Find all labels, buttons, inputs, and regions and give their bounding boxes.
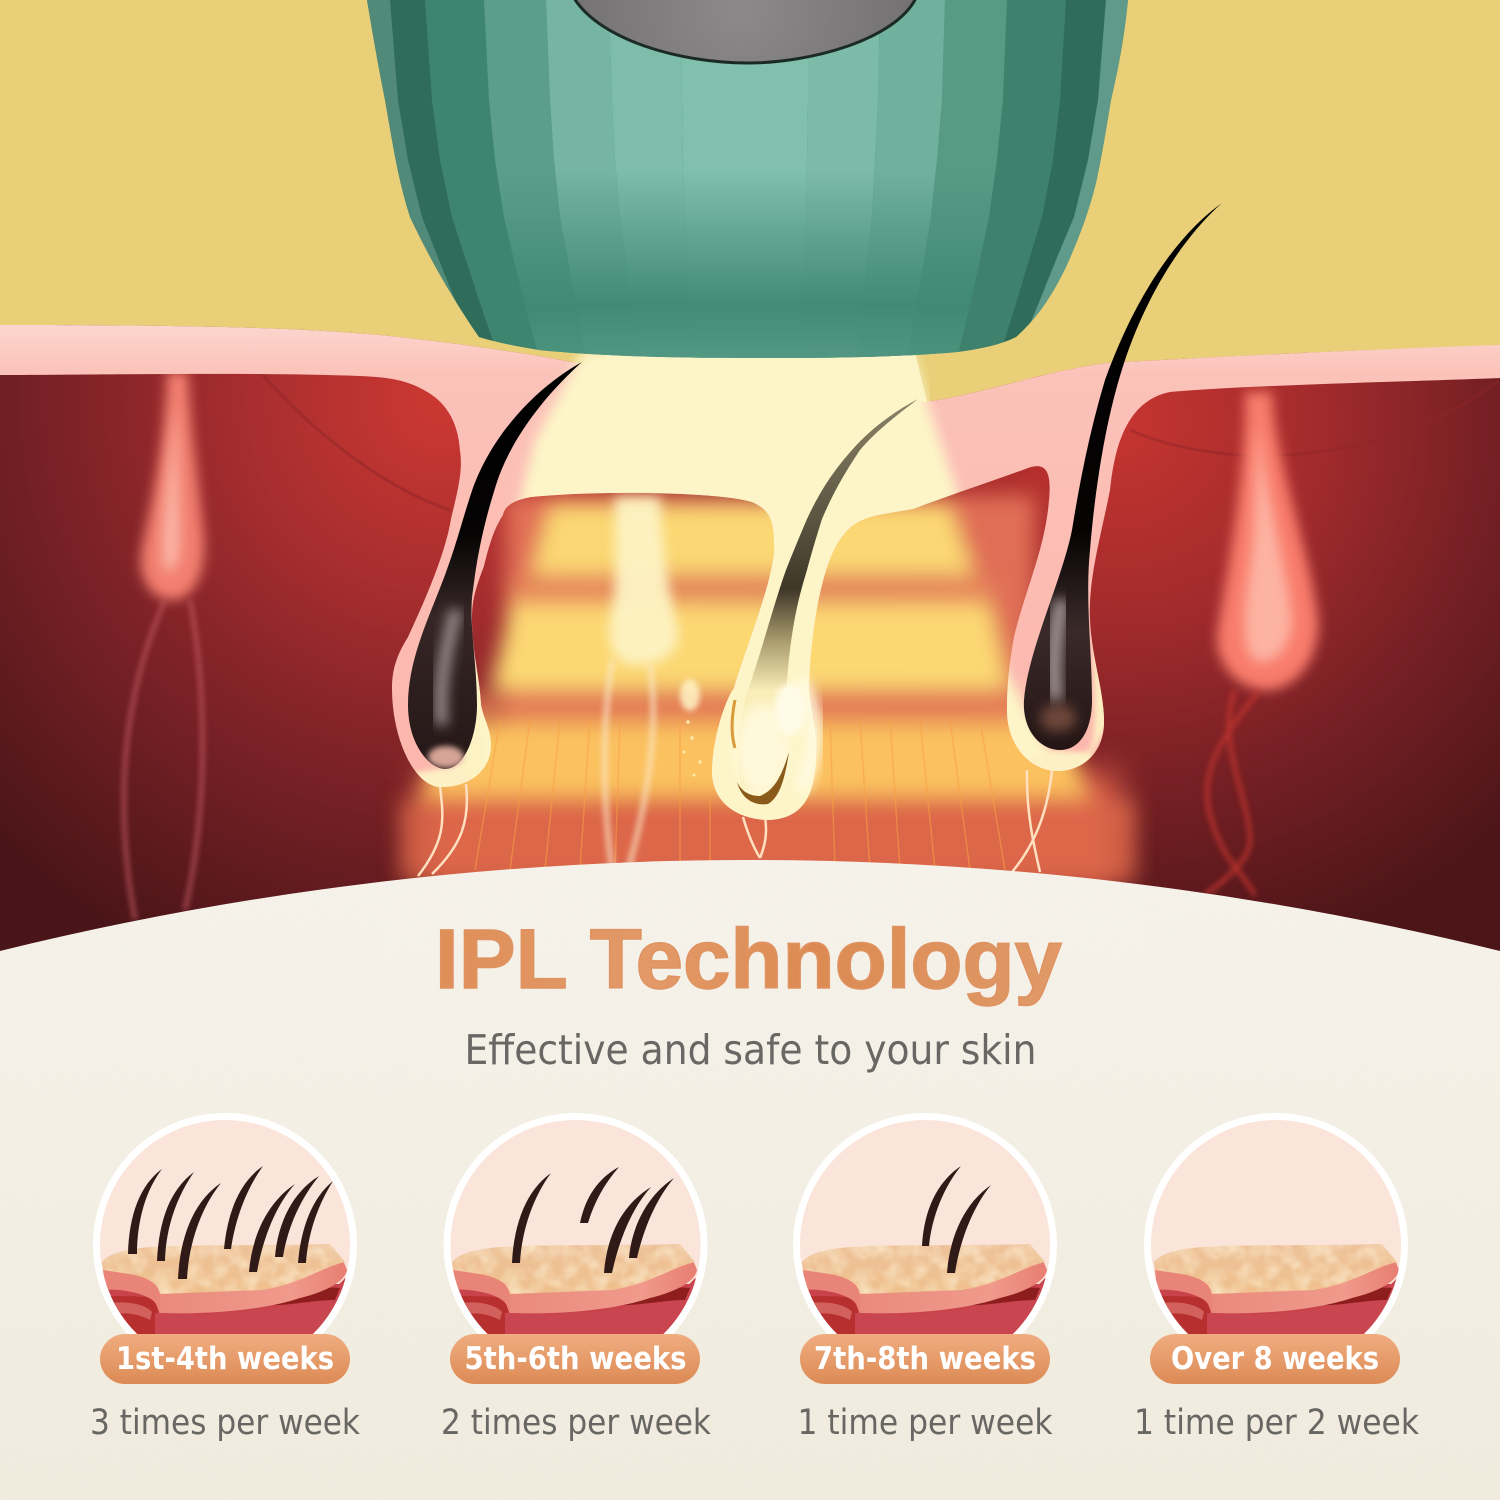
week pill: 7th-8th weeks — [814, 1341, 1036, 1377]
burning middle hair — [680, 399, 918, 804]
light beam bands on dermis — [400, 495, 1135, 890]
right faint follicle — [1205, 392, 1318, 895]
skin layer with follicles — [0, 325, 1500, 820]
circle illustration with four hairs — [444, 1113, 708, 1334]
bottom cream panel — [0, 855, 1500, 1500]
frequency: 3 times per week — [90, 1403, 361, 1443]
left hair — [408, 362, 582, 769]
frequency: 1 time per week — [798, 1403, 1053, 1443]
week pill: 1st-4th weeks — [116, 1341, 334, 1377]
week pill: Over 8 weeks — [1171, 1341, 1379, 1377]
week pill — [800, 1334, 1050, 1384]
week pill — [1150, 1334, 1400, 1384]
device screen — [574, 0, 916, 63]
frequency: 1 time per 2 week — [1134, 1403, 1420, 1443]
circle illustration with two hairs — [793, 1113, 1057, 1334]
step 3: 7th-8th weeks — [793, 1113, 1060, 1443]
subtitle: Effective and safe to your skin — [464, 1026, 1036, 1074]
yellow background — [0, 0, 1500, 402]
fine orange rays — [475, 720, 1005, 870]
right hair — [1024, 203, 1222, 750]
step 2: 5th-6th weeks — [441, 1113, 712, 1443]
step 4: Over 8 weeks — [1134, 1113, 1420, 1443]
circle illustration with seven hairs — [93, 1113, 357, 1334]
cream light on skin — [414, 353, 1104, 820]
device: IPL handset — [360, 0, 1140, 360]
step 1: 1st-4th weeks — [90, 1113, 361, 1443]
left faint follicle — [124, 372, 204, 920]
title: IPL Technology — [435, 912, 1062, 1006]
week pill: 5th-6th weeks — [464, 1341, 686, 1377]
frequency: 2 times per week — [441, 1403, 712, 1443]
week pill — [450, 1334, 700, 1384]
circle illustration with no hairs — [1144, 1113, 1408, 1334]
follicle nerve lines — [418, 770, 1052, 876]
middle faint follicle — [605, 497, 678, 870]
week pill — [100, 1334, 350, 1384]
dermis background — [0, 320, 1500, 960]
